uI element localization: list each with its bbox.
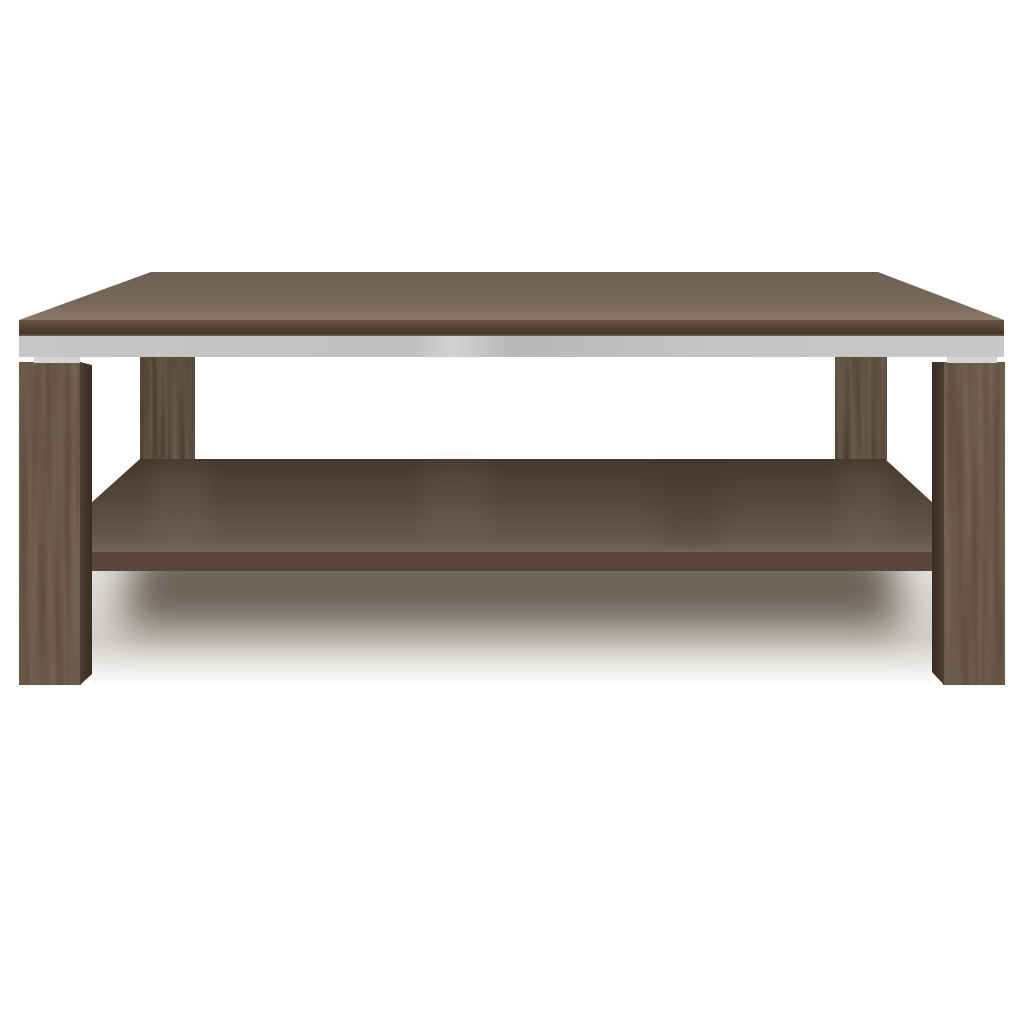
shelf reflections <box>150 465 890 545</box>
table top <box>19 272 1004 336</box>
back left leg <box>140 357 195 460</box>
lower shelf <box>90 459 934 571</box>
metal connectors <box>34 355 997 363</box>
floor shadow <box>92 571 932 679</box>
shelf front edge <box>90 552 934 571</box>
table top front edge <box>19 320 1004 336</box>
metal band <box>19 335 1004 357</box>
front left leg <box>19 362 92 685</box>
illustration: coffee table with lower shelf <box>19 272 1005 685</box>
front right leg <box>932 362 1005 685</box>
back right leg <box>835 357 887 460</box>
